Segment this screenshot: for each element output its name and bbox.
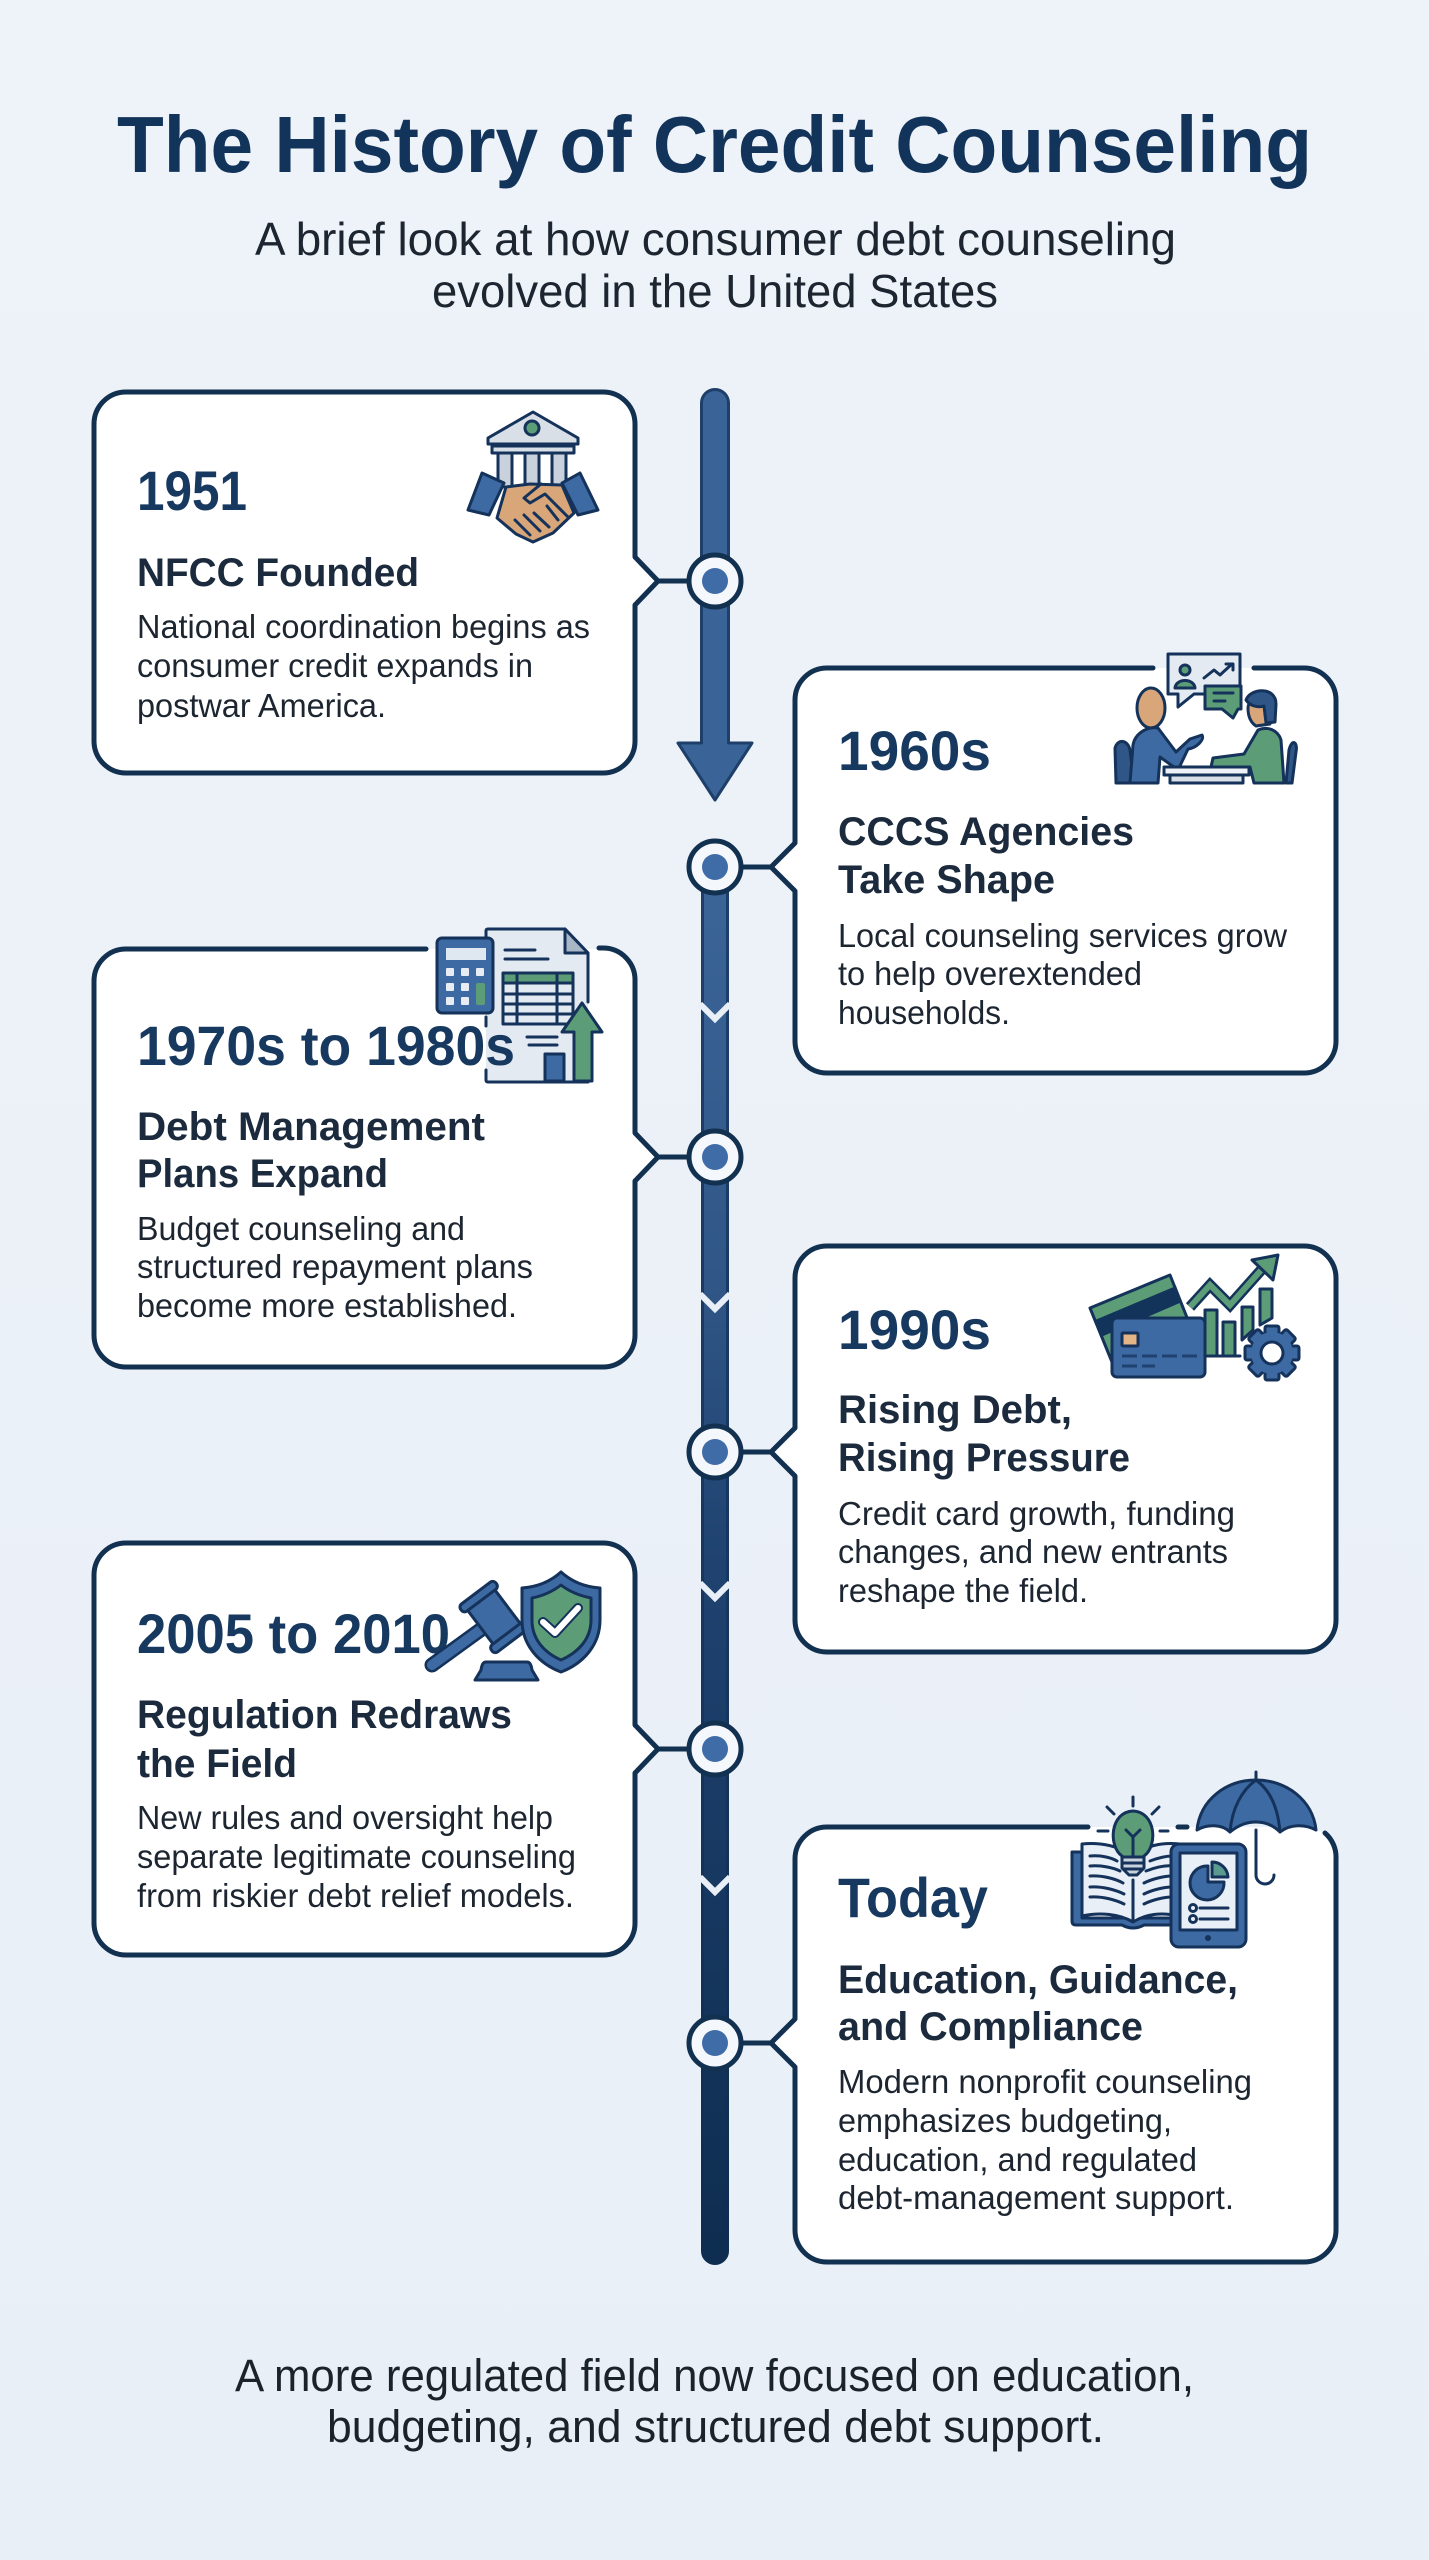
panel: 1990s xyxy=(741,1246,1336,1652)
panel: 2005 to 2010 xyxy=(94,1543,690,1955)
year: 1960s: 1960s xyxy=(838,719,991,782)
footer summary xyxy=(235,2350,1194,2452)
body text: 2005 to 2010 xyxy=(137,1799,576,1914)
body text: 1970s to 1980s xyxy=(137,1210,533,1324)
panel: 1960s xyxy=(741,654,1336,1073)
body text: 2005 to 2010: separate legitimate counseling xyxy=(137,1838,576,1875)
body text: 1960s: to help overextended xyxy=(838,955,1142,992)
heading: CCCS Agencies Take Shape xyxy=(838,810,1134,902)
body text: Today: debt-management support. xyxy=(838,2179,1234,2216)
heading: Regulation Redraws the Field: Regulation Redraws xyxy=(137,1693,512,1737)
body text: 1970s to 1980s: Budget counseling and xyxy=(137,1210,465,1247)
body text: 1951: postwar America. xyxy=(137,687,386,724)
heading: Rising Debt, Rising Pressure: Rising Pressure xyxy=(838,1436,1130,1480)
year: 1951: 1951 xyxy=(137,459,247,522)
body text: 1990s: changes, and new entrants xyxy=(838,1533,1228,1570)
body text: 1990s: Credit card growth, funding xyxy=(838,1495,1235,1532)
body text: Today: education, and regulated xyxy=(838,2141,1197,2178)
body text: 1990s xyxy=(838,1495,1235,1609)
body text: Today: emphasizes budgeting, xyxy=(838,2102,1172,2139)
timeline node: 1951 xyxy=(689,555,741,607)
icon: bank and handshake xyxy=(468,412,598,542)
subtitle xyxy=(255,213,1176,317)
body text: 1970s to 1980s: structured repayment plans xyxy=(137,1248,533,1285)
body text: 1990s: reshape the field. xyxy=(838,1572,1088,1609)
icon: gavel and shield xyxy=(432,1572,600,1680)
heading: Debt Management Plans Expand: Debt Management xyxy=(137,1105,485,1149)
timeline spine: lower track xyxy=(700,867,730,2264)
panel: 1951 xyxy=(94,392,690,773)
heading: Rising Debt, Rising Pressure: Rising Debt, xyxy=(838,1388,1072,1432)
heading: Regulation Redraws the Field: the Field xyxy=(137,1742,297,1786)
heading: CCCS Agencies Take Shape: CCCS Agencies xyxy=(838,810,1134,854)
heading: Education, Guidance, and Compliance: Education, Guidance, xyxy=(838,1958,1238,2002)
subtitle: evolved in the United States xyxy=(432,265,998,317)
heading: Rising Debt, Rising Pressure xyxy=(838,1388,1130,1480)
heading: Education, Guidance, and Compliance xyxy=(838,1958,1238,2049)
panel: 1970s to 1980s xyxy=(94,929,690,1367)
body text: Today xyxy=(838,2063,1252,2216)
heading: Education, Guidance, and Compliance: and Compliance xyxy=(838,2005,1143,2049)
body text: 1960s: Local counseling services grow xyxy=(838,917,1287,954)
year: Today: Today xyxy=(838,1866,988,1929)
icon: credit cards and growth chart xyxy=(1090,1255,1299,1380)
timeline node: 2005 to 2010 xyxy=(689,1723,741,1775)
subtitle: A brief look at how consumer debt counseling xyxy=(255,213,1176,265)
icon: calculator and budget document xyxy=(437,929,602,1082)
year: 1970s to 1980s: 1970s to 1980s xyxy=(137,1014,515,1077)
heading: Debt Management Plans Expand: Plans Expand xyxy=(137,1152,388,1196)
body text: 2005 to 2010: from riskier debt relief models. xyxy=(137,1877,574,1914)
icon: counseling conversation xyxy=(1115,654,1296,783)
body text: 1951: consumer credit expands in xyxy=(137,647,533,684)
footer summary: A more regulated field now focused on education, xyxy=(235,2350,1194,2401)
body text: 1951 xyxy=(137,608,590,724)
heading: CCCS Agencies Take Shape: Take Shape xyxy=(838,858,1055,902)
year: 2005 to 2010: 2005 to 2010 xyxy=(137,1602,450,1665)
timeline spine: upper arrow xyxy=(678,390,752,800)
body text: 2005 to 2010: New rules and oversight help xyxy=(137,1799,553,1836)
body text: 1960s: households. xyxy=(838,994,1010,1031)
heading: Regulation Redraws the Field xyxy=(137,1693,512,1786)
icon: book, bulb, tablet and umbrella xyxy=(1072,1772,1316,1947)
year: 1990s: 1990s xyxy=(838,1298,991,1361)
body text: 1951: National coordination begins as xyxy=(137,608,590,645)
timeline node: 1990s xyxy=(689,1426,741,1478)
body text: Today: Modern nonprofit counseling xyxy=(838,2063,1252,2100)
title: The History of Credit Counseling xyxy=(117,100,1312,189)
footer summary: budgeting, and structured debt support. xyxy=(327,2401,1104,2452)
body text: 1970s to 1980s: become more established. xyxy=(137,1287,517,1324)
heading: NFCC Founded: NFCC Founded xyxy=(137,551,419,595)
panel: Today xyxy=(741,1772,1336,2262)
timeline node: 1960s xyxy=(689,841,741,893)
timeline node: 1970s to 1980s xyxy=(689,1131,741,1183)
body text: 1960s xyxy=(838,917,1287,1031)
timeline node: Today xyxy=(689,2017,741,2069)
heading: Debt Management Plans Expand xyxy=(137,1105,485,1196)
